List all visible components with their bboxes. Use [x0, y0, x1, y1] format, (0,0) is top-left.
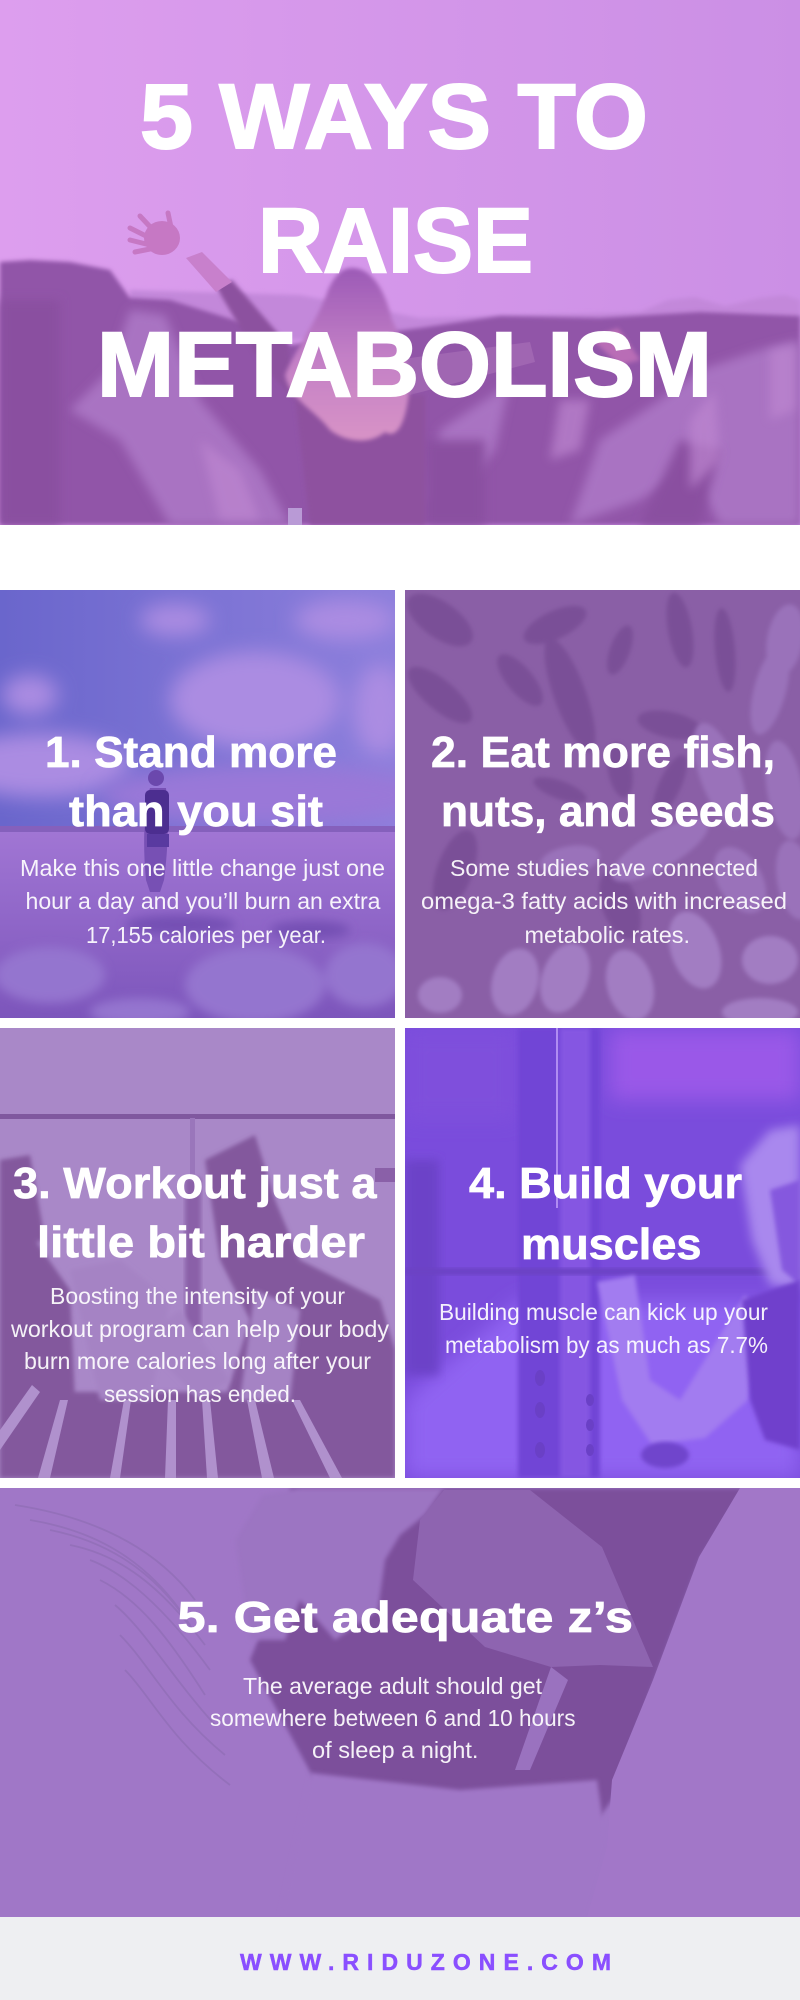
panel: 4 build muscles — [405, 1028, 800, 1478]
photo: two people exercising — [0, 1028, 395, 1478]
body text 2: Some studies have connected — [450, 855, 758, 881]
photo: nuts — [399, 583, 800, 1026]
body text 2: metabolic rates. — [524, 922, 690, 948]
body text 4 — [439, 1299, 768, 1358]
heading 4: 4. Build your — [469, 1159, 742, 1208]
website url: WWW.RIDUZONE.COM — [240, 1949, 611, 1975]
heading 4 — [469, 1159, 742, 1269]
photo: woman lifting barbell — [405, 1028, 800, 1478]
body text 2: omega-3 fatty acids with increased — [421, 888, 787, 914]
panel: 3 workout harder — [0, 1028, 395, 1478]
body text 5 — [210, 1673, 576, 1763]
heading 5: 5. Get adequate z’s — [178, 1593, 633, 1642]
standing figure — [144, 770, 169, 892]
footer bar — [0, 1917, 800, 2000]
body text 3 — [10, 1283, 390, 1407]
body text 1: Make this one little change just one — [20, 855, 385, 881]
hero photo: woman on cliffs — [0, 0, 800, 525]
heading 3: little bit harder — [37, 1218, 365, 1267]
body text 1 — [20, 855, 385, 948]
heading 4: muscles — [521, 1220, 702, 1269]
heading 3 — [13, 1159, 377, 1267]
heading 2: nuts, and seeds — [441, 787, 775, 836]
body text 3: Boosting the intensity of your — [50, 1283, 345, 1309]
body text 5: The average adult should get — [243, 1673, 543, 1699]
panel: hero header — [0, 0, 800, 525]
body text 4: metabolism by as much as 7.7% — [445, 1332, 768, 1358]
body text 5: of sleep a night. — [312, 1737, 478, 1763]
panel: 5 adequate sleep — [0, 1488, 800, 1917]
heading 2 — [431, 728, 775, 836]
body text 1: 17,155 calories per year. — [86, 922, 326, 948]
photo: figure by the sea — [0, 590, 395, 1018]
hero title: 5 WAYS TO — [140, 66, 648, 168]
heading 1: than you sit — [69, 787, 323, 836]
heading 1: 1. Stand more — [45, 728, 337, 777]
body text 2 — [421, 855, 787, 948]
heading 3: 3. Workout just a — [13, 1159, 377, 1208]
woman figure — [130, 213, 640, 525]
woman lifter — [597, 1125, 800, 1468]
hero title: RAISE — [258, 190, 533, 292]
heading 1 — [45, 728, 337, 836]
panel: 1 stand more — [0, 590, 395, 1018]
panel: 2 fish, nuts, seeds — [399, 583, 800, 1026]
body text 4: Building muscle can kick up your — [439, 1299, 768, 1325]
body text 3: session has ended. — [104, 1381, 296, 1407]
body text 5: somewhere between 6 and 10 hours — [210, 1705, 576, 1731]
body text 3: burn more calories long after your — [24, 1348, 371, 1374]
body text 3: workout program can help your body — [10, 1316, 390, 1342]
body text 1: hour a day and you’ll burn an extra — [26, 888, 381, 914]
heading 2: 2. Eat more fish, — [431, 728, 775, 777]
hero title: METABOLISM — [97, 314, 712, 416]
photo: person sleeping with eye mask — [0, 1488, 800, 1917]
hero title — [97, 66, 712, 416]
